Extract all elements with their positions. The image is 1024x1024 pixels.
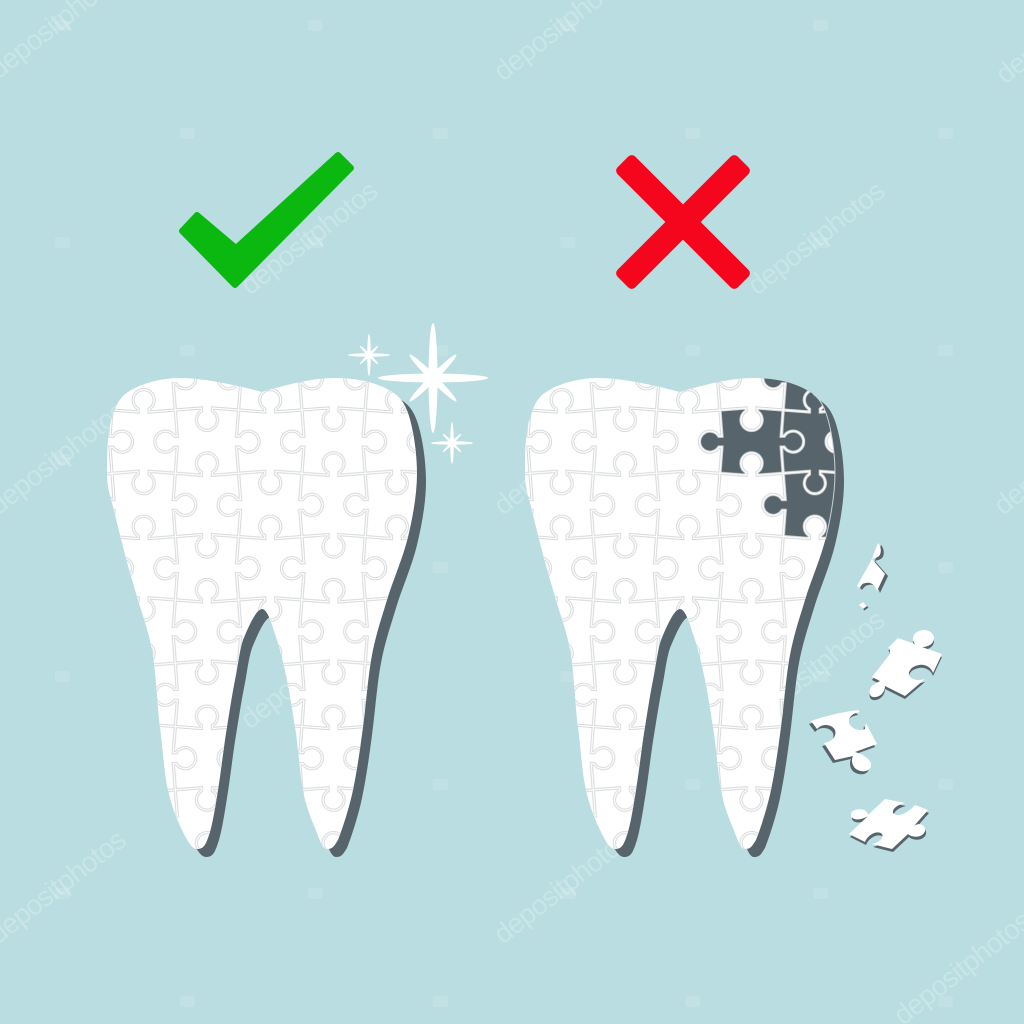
large sparkle xyxy=(378,323,488,433)
watermark text: depositphotos xyxy=(488,824,637,950)
damaged tooth body xyxy=(525,378,835,849)
healthy tooth body xyxy=(107,378,417,849)
icon: red cross xyxy=(614,153,752,291)
small sparkle left xyxy=(348,334,390,376)
icon: green check mark xyxy=(182,155,351,285)
watermark text: depositphotos xyxy=(742,604,891,730)
loose puzzle piece 1 xyxy=(870,630,942,700)
watermark text: depositphotos xyxy=(235,609,384,735)
watermark text: depositphotos xyxy=(742,175,891,301)
healthy tooth puzzle lines xyxy=(100,370,430,860)
loose puzzle piece 3 xyxy=(849,799,929,852)
loose puzzle piece 2 xyxy=(809,710,877,774)
tooth edge line over dark pieces xyxy=(813,394,836,540)
watermark text: depositphotos xyxy=(488,395,637,521)
healthy tooth xyxy=(100,370,430,860)
missing dark puzzle pieces xyxy=(700,378,834,538)
damaged tooth shadow xyxy=(534,386,844,857)
damaged tooth puzzle lines xyxy=(518,370,848,860)
damaged tooth xyxy=(518,347,848,860)
watermark text: depositphotos xyxy=(235,175,384,301)
falling puzzle fragment xyxy=(857,543,888,593)
small puzzle chip xyxy=(859,602,868,610)
healthy tooth shadow xyxy=(116,386,426,857)
sparkles xyxy=(348,323,488,464)
small sparkle right xyxy=(431,422,473,464)
